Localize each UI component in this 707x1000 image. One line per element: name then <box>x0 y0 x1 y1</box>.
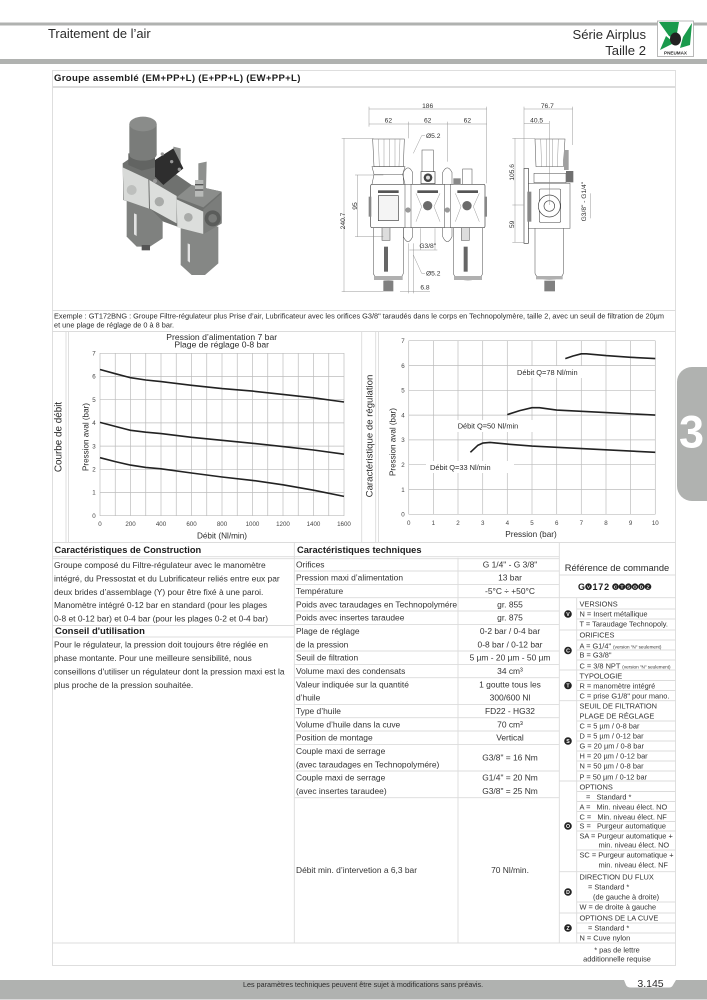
footnote: additionnelle requise <box>583 955 651 964</box>
x axis ticks: 0 <box>98 521 102 528</box>
x axis ticks: 9 <box>629 520 633 527</box>
options list: (de gauche à droite) <box>593 893 659 902</box>
label: Q=33 <box>426 461 514 473</box>
dimensions: 62 <box>385 118 392 125</box>
parameter values: 70 Nl/min. <box>491 865 529 875</box>
y axis title: Pression aval (bar) <box>388 408 398 476</box>
bullet: O: O <box>566 824 570 830</box>
options list: D = 5 µm / 0-12 bar <box>580 732 644 741</box>
options list: G = 20 µm / 0-8 bar <box>580 742 644 751</box>
chart title: Pression d’alimentation 7 bar <box>166 332 277 342</box>
options list: N = 50 µm / 0-8 bar <box>580 762 644 771</box>
y axis ticks: 7 <box>401 338 405 345</box>
parameter names: Couple maxi de serrage <box>296 773 386 783</box>
x axis ticks: 1600 <box>337 521 351 528</box>
parameter names: Plage de réglage <box>296 626 360 636</box>
parameter values: 70 cm³ <box>497 719 523 729</box>
parameter values <box>470 559 550 875</box>
dimensions left of front view <box>340 138 383 292</box>
x axis ticks: 1000 <box>246 521 260 528</box>
options list: C = 3/8 NPT (version "N" seulement) <box>580 661 671 670</box>
usage advice heading: Conseil d'utilisation <box>55 626 145 637</box>
x axis ticks: 0 <box>407 520 411 527</box>
x axis ticks: 1400 <box>307 521 321 528</box>
x axis ticks: 10 <box>652 520 659 527</box>
order code: Z <box>647 584 650 590</box>
y axis ticks: 0 <box>401 512 405 519</box>
x axis ticks: 800 <box>217 521 228 528</box>
dimensions <box>369 103 591 293</box>
description <box>54 560 280 624</box>
x axis title: Pression (bar) <box>505 530 557 539</box>
x axis ticks: 3 <box>481 520 485 527</box>
options list: = Standard * <box>588 923 629 932</box>
example caption: et une plage de réglage de 0 à 8 bar. <box>54 320 174 330</box>
parameter values: gr. 875 <box>497 613 523 623</box>
bullet: V: V <box>566 612 570 618</box>
options list: min. niveau élect. NF <box>598 861 668 870</box>
dimensions left of front view: 240.7 <box>340 212 347 229</box>
parameter names: Poids avec insertes taraudee <box>296 613 405 623</box>
page title: Traitement de l’air <box>48 26 151 41</box>
heading: Référence de commande <box>565 563 669 573</box>
example caption: Exemple : GT172BNG : Groupe Filtre-régulateur plus Prise d’air, Lubrificateur avec les orifices G3/8" taraudés dans le corps en Technopolymère, taille 2, avec un seuil de filtration de 20µm <box>54 312 664 320</box>
options list: W = de droite à gauche <box>580 903 656 912</box>
chart: flow curve <box>82 332 351 540</box>
side label: flow curve: Courbe de débit <box>54 402 64 472</box>
options list: PLAGE DE RÉGLAGE <box>580 711 654 720</box>
description: Manomètre intégré 0-12 bar en standard (pour les plages <box>54 600 267 610</box>
options list: N = Insert métallique <box>580 610 648 619</box>
footnote: * pas de lettre <box>594 946 640 955</box>
parameter names: Valeur indiquée sur la quantité <box>296 679 409 689</box>
options list: B = G3/8" <box>580 651 612 660</box>
options list: SEUIL DE FILTRATION <box>580 701 657 710</box>
parameter names: de la pression <box>296 639 349 649</box>
section heading: Groupe assemblé (EM+PP+L) (E+PP+L) (EW+PP+L) <box>54 73 301 84</box>
table: technical characteristics <box>294 542 559 943</box>
options list: ORIFICES <box>580 631 614 640</box>
description: intégré, du Pressostat et du Lubrificateur reliés entre eux par <box>54 574 280 584</box>
bullet: T <box>564 682 572 690</box>
options list: C = Min. niveau élect. NF <box>580 812 667 821</box>
dimensions: G3/8" - G1/4" <box>581 181 588 221</box>
x axis ticks: 600 <box>186 521 197 528</box>
header band <box>0 22 707 64</box>
x axis ticks: 4 <box>506 520 510 527</box>
panel: order reference <box>559 542 676 964</box>
options list <box>580 600 674 942</box>
options list: OPTIONS <box>580 782 613 791</box>
parameter values: -5°C ÷ +50°C <box>485 586 535 596</box>
heading: Caractéristiques techniques <box>297 545 422 555</box>
options list: A = Min. niveau élect. NO <box>580 802 667 811</box>
disclaimer: Les paramètres techniques peuvent être sujet à modifications sans préavis. <box>243 980 483 989</box>
order code: O <box>633 584 637 590</box>
options list: C = 5 µm / 0-8 bar <box>580 722 640 731</box>
x axis ticks <box>98 521 351 528</box>
options list: R = manomètre intégré <box>580 681 655 690</box>
parameter values: G3/8" = 16 Nm <box>482 752 538 762</box>
options list: SC = Purgeur automatique + <box>580 851 674 860</box>
label: Q=78 <box>512 366 600 378</box>
x axis ticks: 400 <box>156 521 167 528</box>
size label: Taille 2 <box>605 43 646 58</box>
dimensions: 105.6 <box>509 164 516 181</box>
dimensions: 62 <box>464 118 471 125</box>
options list: = Standard * <box>588 883 629 892</box>
options list: min. niveau élect. NO <box>598 841 669 850</box>
parameter names: Pression maxi d’alimentation <box>296 573 403 583</box>
x axis ticks: 5 <box>530 520 534 527</box>
parameter names: Poids avec taraudages en Technopolymére <box>296 599 457 609</box>
x axis ticks: 7 <box>580 520 584 527</box>
chart title <box>166 332 277 350</box>
y axis ticks: 1 <box>92 490 96 497</box>
curve: Q=50 <box>507 408 655 415</box>
parameter names: (avec taraudages en Technopolymére) <box>296 759 440 769</box>
parameter values: 34 cm³ <box>497 666 523 676</box>
y axis ticks: 6 <box>92 374 96 381</box>
panel: construction characteristics <box>52 545 294 690</box>
page number: 3.145 <box>637 978 664 990</box>
options list: VERSIONS <box>580 600 618 609</box>
options list: P = 50 µm / 0-12 bar <box>580 772 648 781</box>
y axis ticks: 4 <box>401 412 405 419</box>
x axis title: Débit (Nl/min) <box>197 532 247 540</box>
dimensions: 76.7 <box>541 103 554 110</box>
order code: C <box>614 584 618 590</box>
options list: T = Taraudage Technopoly. <box>580 620 668 629</box>
side label: regulation characteristic: Caractéristique de régulation <box>364 375 376 497</box>
parameter names: Couple maxi de serrage <box>296 746 386 756</box>
order code: T <box>621 584 624 590</box>
options list: S = Purgeur automatique <box>580 822 666 831</box>
parameter values: 1 goutte tous les <box>479 679 541 689</box>
options list: H = 20 µm / 0-12 bar <box>580 752 648 761</box>
description: deux brides d’assemblage (Y) pour être fixé à une paroi. <box>54 587 263 597</box>
y axis ticks: 5 <box>401 388 405 395</box>
bullet: S <box>564 737 572 745</box>
usage advice text: plus proche de la pression souhaitée. <box>54 680 193 690</box>
y axis ticks: 6 <box>401 363 405 370</box>
logo: Pneumax: PNEUMAX <box>664 50 688 56</box>
y axis ticks: 4 <box>92 420 96 427</box>
bullet: S: S <box>566 739 570 745</box>
y axis ticks: 1 <box>401 487 405 494</box>
y axis ticks: 3 <box>92 443 96 450</box>
order code: G <box>578 582 585 592</box>
description: 0-8 et 0-12 bar) et 0-4 bar (pour les plages 0-2 et 0-4 bar) <box>54 614 268 624</box>
y axis ticks: 7 <box>92 350 96 358</box>
y axis ticks: 2 <box>92 466 96 474</box>
x axis ticks: 1200 <box>276 521 290 528</box>
y axis title: Pression aval (bar) <box>82 403 90 471</box>
order code: S <box>627 584 631 590</box>
x axis ticks <box>407 520 659 527</box>
y axis ticks: 2 <box>401 462 405 469</box>
parameter names: Orifices <box>296 559 324 569</box>
label: Q=78: Débit Q=78 Nl/min <box>517 368 578 377</box>
x axis ticks: 200 <box>125 521 136 528</box>
side tab: chapter 3: 3 <box>679 406 704 458</box>
options list: TYPOLOGIE <box>580 671 622 680</box>
label: Q=33: Débit Q=33 Nl/min <box>430 463 491 472</box>
heading: Caractéristiques de Construction <box>54 545 202 555</box>
parameter names: d’huile <box>296 693 321 703</box>
dimensions: Ø5.2 <box>426 133 441 140</box>
label: Q=50 <box>453 420 543 432</box>
bullet: V <box>564 610 572 618</box>
parameter names <box>296 559 457 875</box>
bullet: Z: Z <box>566 926 570 932</box>
x axis ticks: 2 <box>456 520 460 527</box>
parameter names: Débit min. d’intervetion a 6,3 bar <box>296 865 417 875</box>
y axis ticks: 5 <box>92 397 96 404</box>
options list: OPTIONS DE LA CUVE <box>580 914 658 923</box>
usage advice text: phase montante. Pour une meilleure sensibilité, nous <box>54 653 252 663</box>
parameter values: gr. 855 <box>497 599 523 609</box>
logo: Pneumax <box>658 21 694 56</box>
bullet: Z <box>564 924 572 932</box>
x axis ticks: 1 <box>432 520 436 527</box>
options list: C = prise G1/8" pour mano. <box>580 691 669 700</box>
description: Groupe composé du Filtre-régulateur avec le manomètre <box>54 560 266 570</box>
dimensions: 40.5 <box>530 118 543 125</box>
dimensions: 59 <box>509 220 516 228</box>
curve: 2.5 bar <box>100 458 344 496</box>
parameter values: 0-8 bar / 0-12 bar <box>478 639 543 649</box>
bullet: T: T <box>566 684 570 690</box>
parameter values: 5 µm - 20 µm - 50 µm <box>470 653 550 663</box>
parameter values: G3/8" = 25 Nm <box>482 786 538 796</box>
page number <box>624 978 676 990</box>
label: Q=50: Débit Q=50 Nl/min <box>458 422 518 430</box>
footer band <box>0 978 707 1000</box>
parameter values: 300/600 Nl <box>490 693 530 703</box>
y axis ticks <box>401 338 405 519</box>
order code <box>578 582 651 592</box>
bullet: O <box>564 822 572 830</box>
dimensions: G3/8" <box>419 243 437 250</box>
options list: N = Cuve nylon <box>580 933 630 942</box>
curve: 6.3 bar <box>100 370 344 402</box>
bullet: C: C <box>566 648 570 654</box>
parameter names: Type d’huile <box>296 706 341 716</box>
parameter names: Volume d’huile dans la cuve <box>296 719 401 729</box>
order code: V <box>587 584 591 590</box>
curve: Q=78 <box>565 354 655 359</box>
chart title: Plage de réglage 0-8 bar <box>174 340 269 350</box>
parameter values: Vertical <box>496 733 524 743</box>
order code: D <box>640 584 644 590</box>
example caption <box>54 312 664 330</box>
side view body <box>524 139 573 291</box>
chart: regulation characteristic <box>388 338 659 539</box>
options list: A = G1/4" (version "N" seulement) <box>580 641 662 650</box>
usage advice text: conseillons d'utiliser un régulateur dont la pression maxi est la <box>54 666 285 676</box>
y axis ticks <box>92 350 96 520</box>
parameter names: Température <box>296 586 344 596</box>
parameter names: Position de montage <box>296 733 373 743</box>
parameter values: G 1/4" - G 3/8" <box>483 559 537 569</box>
y axis ticks: 0 <box>92 513 96 520</box>
parameter values: G1/4" = 20 Nm <box>482 773 538 783</box>
dimensions: 62 <box>424 118 432 125</box>
main frame <box>52 70 676 966</box>
bullet: D: D <box>566 890 570 896</box>
curve: Q=33 <box>470 442 655 452</box>
parameter values: 13 bar <box>498 573 522 583</box>
dimensions: Ø5.2 <box>426 271 441 278</box>
parameter values: 0-2 bar / 0-4 bar <box>480 626 540 636</box>
bullet: C <box>564 647 572 654</box>
front view body <box>369 139 487 291</box>
side tab: chapter 3 <box>677 367 707 501</box>
parameter names: (avec insertes taraudee) <box>296 786 387 796</box>
options list: = Standard * <box>586 792 632 801</box>
footnote <box>583 946 651 964</box>
usage advice text <box>54 640 285 690</box>
x axis ticks: 6 <box>555 520 559 527</box>
bullet: D <box>564 888 572 896</box>
options list: DIRECTION DU FLUX <box>580 873 654 882</box>
x axis ticks: 8 <box>604 520 608 527</box>
dimensions left of front view: 95 <box>352 202 359 210</box>
usage advice text: Pour le régulateur, la pression doit toujours être réglée en <box>54 640 268 650</box>
product photo: assembled air treatment unit <box>123 117 222 275</box>
curve: 4 bar <box>100 422 344 454</box>
dimensions: 6.8 <box>420 285 430 292</box>
dimensions: 186 <box>422 103 434 110</box>
series name: Série Airplus <box>572 27 646 42</box>
y axis ticks: 3 <box>401 437 405 444</box>
parameter names: Volume maxi des condensats <box>296 666 405 676</box>
options list: SA = Purgeur automatique + <box>580 832 673 841</box>
parameter values: FD22 - HG32 <box>485 706 535 716</box>
technical drawing: front view with dimensions <box>369 103 591 293</box>
parameter names: Seuil de filtration <box>296 653 358 663</box>
order code: 172 <box>592 582 610 592</box>
